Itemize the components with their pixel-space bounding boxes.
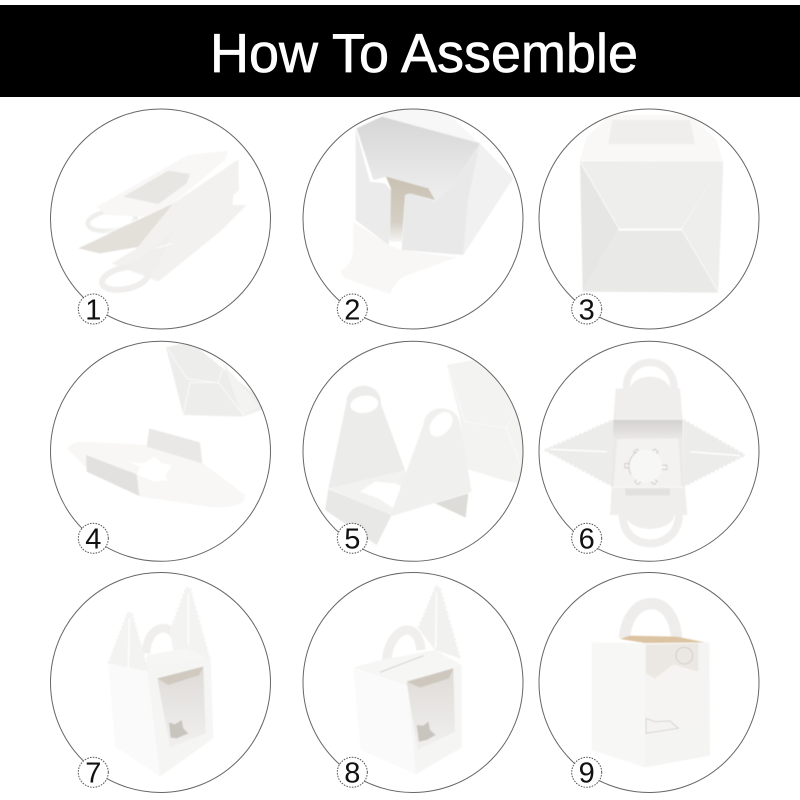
panel: step 9: [539, 572, 759, 792]
illustration: insert and box: [67, 342, 270, 507]
title banner: [0, 5, 800, 97]
circle outline: [50, 572, 270, 792]
panel: step 8: [303, 572, 523, 792]
panel: step 2: [303, 107, 523, 329]
circle outline: [539, 341, 759, 561]
step number badge: [572, 294, 602, 326]
step number badge: 9: [579, 758, 595, 790]
step number badge: [572, 523, 602, 556]
illustration: box with two raised flaps: [108, 587, 213, 777]
step number badge: 6: [579, 524, 595, 556]
title banner: How To Assemble: [210, 22, 638, 84]
circle outline: [539, 109, 759, 329]
step number badge: [337, 294, 367, 326]
illustration: open box from above: [545, 362, 745, 543]
panel: step 5: [303, 341, 528, 561]
illustration: box with one raised flap: [353, 585, 462, 774]
step number badge: [78, 294, 108, 326]
illustration: insert with handles: [325, 360, 528, 545]
step number badge: 5: [344, 524, 360, 556]
circle outline: [303, 341, 523, 561]
circle outline: [50, 109, 270, 329]
circle outline: [303, 572, 523, 792]
panel: step 1: [50, 109, 270, 329]
step number badge: 7: [85, 758, 101, 790]
panel: step 6: [539, 341, 759, 561]
step number badge: 4: [85, 524, 101, 556]
illustration: finished box with handle: [592, 604, 710, 767]
illustration: flattened box: [78, 151, 247, 294]
panel: step 3: [539, 109, 759, 329]
step number badge: 1: [85, 294, 101, 326]
circle outline: [50, 341, 270, 561]
step number badge: 3: [579, 294, 595, 326]
step number badge: 2: [344, 294, 360, 326]
illustration: box bottom folding: [341, 107, 513, 294]
circle outline: [539, 572, 759, 792]
step number badge: [337, 523, 367, 556]
panel: step 7: [50, 572, 270, 792]
step number badge: 8: [344, 758, 360, 790]
panel: step 4: [50, 341, 270, 561]
step number badge: [572, 757, 602, 790]
illustration: closed box bottom: [580, 115, 723, 293]
step number badge: [337, 757, 367, 790]
step number badge: [78, 523, 108, 556]
step number badge: [78, 757, 108, 790]
circle outline: [303, 109, 523, 329]
